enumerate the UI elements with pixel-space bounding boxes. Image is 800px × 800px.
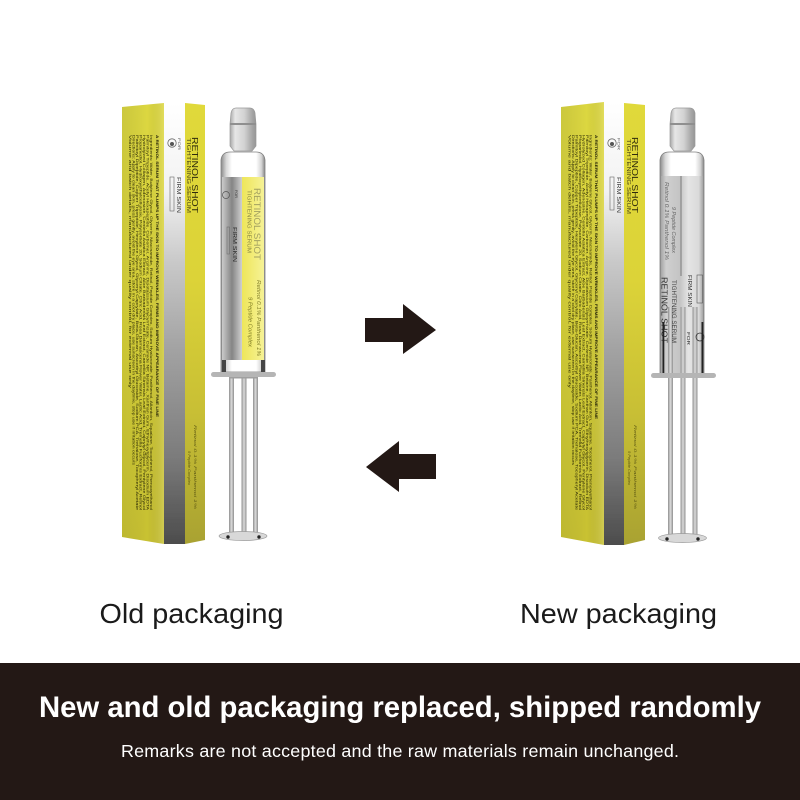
old syringe label text: FOR: [234, 190, 239, 198]
new box silver face: [604, 102, 624, 545]
old syringe label text: FIRM SKIN: [231, 227, 237, 262]
old syringe cap: [230, 108, 256, 151]
new box footer note: 9 Peptide Complex: [627, 451, 632, 486]
new box body copy: Palmitoyl Tripeptide, Acetyl Hexapeptide, Carbomer, Arginine, Dipotassium Glycyrrhizate, Ceramide NP, Betaine, Xanthan Gum, Ethylhexylglycerin, Disodium EDTA: [585, 135, 589, 511]
new syringe label text: RETINOL SHOT: [660, 277, 670, 343]
new box footer note: [627, 425, 638, 510]
new box right face: [624, 103, 645, 545]
old box silver label: FIRM SKIN: [175, 177, 181, 213]
new box silver label: FOR: [616, 138, 622, 150]
old box right face: [185, 103, 205, 544]
footer band: [0, 663, 800, 800]
new syringe label text: [660, 182, 704, 373]
new syringe label text: FOR: [686, 332, 691, 346]
label: new packaging: New packaging: [520, 598, 717, 629]
old syringe plunger base: [219, 532, 267, 540]
old syringe plunger rods: [229, 377, 258, 533]
old syringe label text: 9 Peptide Complex: [246, 297, 252, 348]
old box body copy: Hydrolyzed Collagen, Adenosine, Centella Asiatica Extract, Aloe Barbadensis Leaf Extract, Camellia Sinensis Leaf Extract, Caprylyl Glycol, Pentylene Glycol: [142, 135, 146, 510]
new box body copy: Volume and batch details, manufactured under quality control, for external use only: [568, 135, 572, 389]
new box title: [625, 137, 639, 214]
new syringe label text: FIRM SKIN: [686, 275, 692, 307]
footer remark: Remarks are not accepted and the raw materials remain unchanged.: [121, 741, 679, 761]
old box body copy: A RETINOL SERUM THAT PLUMPS UP THE SKIN TO IMPROVE WRINKLES, FIRMS AND IMPROVE APPEARANCE OF FINE LINE: [155, 135, 159, 418]
old product box: [122, 103, 205, 544]
old box body copy: Palmitoyl Tripeptide, Acetyl Hexapeptide, Carbomer, Arginine, Dipotassium Glycyrrhizate, Ceramide NP, Betaine, Xanthan Gum, Ethylhexylglycerin, Disodium EDTA: [146, 135, 150, 511]
new box footer note: Retinol 0.1% Panthenol 1%: [633, 425, 638, 510]
old syringe label text: Retinol 0.1% Panthenol 1%: [255, 280, 261, 357]
old syringe label text: [222, 188, 262, 357]
new box silver label: [608, 138, 622, 213]
new box body copy: [568, 135, 598, 511]
new product box: [561, 102, 645, 545]
old box body copy: Directions: Apply to clean skin, press gently, avoid the eye area, store in a cool dry place, use sunscreen in the daytime, stop use if irritation occurs: [132, 135, 136, 466]
old box footer note: 9 Peptide Complex: [187, 451, 192, 486]
old box body copy: Propanediol, Hydroxyethylcellulose, Polysorbate 20, Sodium Citrate, Citric Acid, Rosa Damascena Flower Water, Lactic Acid, Tremella Fuciformis Extract, Retinol: [138, 135, 142, 510]
old box silver face: [164, 103, 185, 544]
old box body copy: Volume and batch details, manufactured under quality control, for external use only: [128, 135, 132, 389]
new syringe plunger base: [658, 534, 706, 542]
new syringe: [651, 108, 716, 542]
old syringe label text: RETINOL SHOT: [252, 188, 262, 261]
old box footer note: [187, 425, 198, 510]
old box body copy: Palmitoyl Dipeptide, Copper Tripeptide, Hexylene Glycol, Glyceryl Caprylate, Beta-Glucan, Ascorbyl Glucoside, Sodium PCA, Trehalose, Tocopheryl Acetate: [135, 135, 139, 510]
old box silver label: [168, 138, 182, 213]
new box body copy: Propanediol, Hydroxyethylcellulose, Polysorbate 20, Sodium Citrate, Citric Acid, Rosa Damascena Flower Water, Lactic Acid, Tremella Fuciformis Extract, Retinol: [578, 135, 582, 510]
old box body copy: [128, 135, 159, 511]
arrow: new to old: [366, 441, 436, 492]
old box title: RETINOL SHOT: [190, 137, 199, 213]
new syringe barrel: [660, 152, 704, 373]
new syringe cap: [670, 108, 695, 151]
old box silver label: FOR: [177, 138, 182, 150]
new box body copy: A RETINOL SERUM THAT PLUMPS UP THE SKIN TO IMPROVE WRINKLES, FIRMS AND IMPROVE APPEARANCE OF FINE LINE: [594, 135, 598, 420]
old box left face: [122, 103, 164, 544]
new box body copy: Directions: Apply to clean skin, press gently, avoid the eye area, store in a cool dry place, use sunscreen in the daytime, stop use if irritation occurs: [571, 135, 575, 466]
old box title: [185, 137, 199, 213]
old syringe label text: TIGHTENING SERUM: [246, 190, 252, 253]
old syringe: [211, 108, 276, 540]
new syringe plunger rods: [668, 307, 698, 535]
new box left face: [561, 102, 604, 545]
old syringe flange: [211, 372, 276, 377]
new syringe label text: Retinol 0.1% Panthenol 1%: [663, 182, 669, 261]
new syringe flange: [651, 373, 716, 378]
new box title: RETINOL SHOT: [630, 137, 639, 213]
old box body copy: Ingredients: Water, Butylene Glycol, Glycerin, Niacinamide, Retinol, Peptide Complex, Sodium Hyaluronate, Panthenol, Allantoin, Squalane, Tocopherol, Phenoxyethanol: [149, 135, 153, 510]
arrow: old to new: [365, 304, 436, 354]
label: old packaging: Old packaging: [100, 598, 284, 629]
new box body copy: Ingredients: Water, Butylene Glycol, Glycerin, Niacinamide, Retinol, Peptide Complex, Sodium Hyaluronate, Panthenol, Allantoin, Squalane, Tocopherol, Phenoxyethanol: [588, 135, 592, 510]
old box footer note: Retinol 0.1% Panthenol 1%: [193, 425, 198, 510]
new syringe label text: 9 Peptide Complex: [670, 207, 676, 254]
new box body copy: Hydrolyzed Collagen, Adenosine, Centella Asiatica Extract, Aloe Barbadensis Leaf Extract, Camellia Sinensis Leaf Extract, Caprylyl Glycol, Pentylene Glycol: [582, 135, 586, 510]
new syringe label text: TIGHTENING SERUM: [670, 280, 676, 343]
old syringe barrel: [221, 152, 265, 372]
new box body copy: Palmitoyl Dipeptide, Copper Tripeptide, Hexylene Glycol, Glyceryl Caprylate, Beta-Glucan, Ascorbyl Glucoside, Sodium PCA, Trehalose, Tocopheryl Acetate: [574, 135, 578, 510]
new box silver label: FIRM SKIN: [615, 177, 621, 213]
old box title: TIGHTENING SERUM: [185, 138, 191, 213]
new box title: TIGHTENING SERUM: [625, 139, 631, 214]
footer heading: New and old packaging replaced, shipped randomly: [39, 691, 762, 724]
